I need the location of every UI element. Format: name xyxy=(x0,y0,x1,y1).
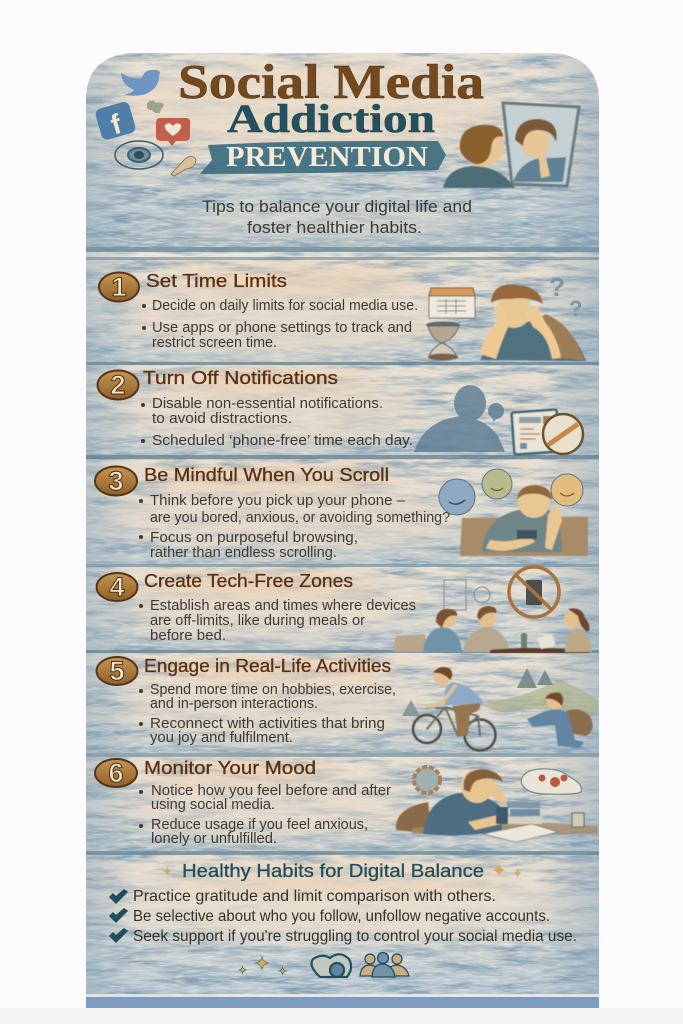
icon: heart cloud xyxy=(312,954,351,977)
section 2: Turn Off Notifications xyxy=(98,367,583,454)
panel: textured background xyxy=(86,52,599,1008)
icon: stars: ✦ xyxy=(254,953,270,975)
bullets 4: Establish areas and times where devices xyxy=(150,598,416,614)
checklist: Seek support if you're struggling to control your social media use. xyxy=(133,928,577,945)
bullets 3: are you bored, anxious, or avoiding something? xyxy=(150,510,450,526)
subtitle: foster healthier habits. xyxy=(247,219,422,237)
bullets 4 xyxy=(139,598,416,644)
landscape xyxy=(402,668,598,716)
checklist xyxy=(110,888,577,945)
heading: Healthy Habits: Healthy Habits for Digital Balance xyxy=(182,860,484,881)
bullets 5 xyxy=(139,682,396,746)
bullets 1: Use apps or phone settings to track and xyxy=(152,320,412,336)
icon: facebook: f xyxy=(107,108,125,141)
subtitle: Tips to balance your digital life and xyxy=(202,198,472,216)
icon: community people xyxy=(360,952,409,977)
icon: heart bubble xyxy=(156,118,190,146)
number badge 6: 6 xyxy=(108,758,124,788)
section 5: Engage in Real-Life Activities xyxy=(96,655,598,750)
heading 5: Engage in Real-Life Activities xyxy=(144,655,391,676)
faint window and clock xyxy=(444,580,490,610)
bullets 3: Focus on purposeful browsing, xyxy=(150,530,358,546)
number badge 2 xyxy=(98,370,138,400)
number badge 4: 4 xyxy=(109,572,125,602)
bullets 1: restrict screen time. xyxy=(152,335,277,351)
question marks xyxy=(549,272,582,321)
section 3: Be Mindful When You Scroll xyxy=(95,464,588,561)
number badge 3 xyxy=(95,466,137,496)
bullets 2: to avoid distractions. xyxy=(152,411,292,427)
number badge 3: 3 xyxy=(108,466,124,496)
icon: twitter bird xyxy=(121,70,160,96)
number badge 1: 1 xyxy=(111,272,127,302)
number badge 4 xyxy=(96,572,138,602)
bullets 6: Notice how you feel before and after xyxy=(151,783,391,799)
number badge 5 xyxy=(96,656,138,686)
icon: eye xyxy=(115,141,163,169)
bullets 5: and in-person interactions. xyxy=(150,696,318,712)
heading 3: Be Mindful When You Scroll xyxy=(144,464,389,485)
number badge 6 xyxy=(95,758,137,788)
bullets 2 xyxy=(141,396,413,449)
bullets 5: Spend more time on hobbies, exercise, xyxy=(150,682,396,698)
bullets 2: Disable non-essential notifications. xyxy=(152,396,383,412)
icon: no-phone sign xyxy=(509,567,559,617)
bullets 6: lonely or unfulfilled. xyxy=(151,831,277,847)
sparkles: ✦ xyxy=(512,867,523,882)
illustration: stressed man xyxy=(480,285,586,361)
number badge 5: 5 xyxy=(109,656,125,686)
illustration: man reading with phone xyxy=(396,769,598,842)
number badge 2: 2 xyxy=(110,370,126,400)
icon: hourglass xyxy=(426,322,460,360)
bullets 6: using social media. xyxy=(151,797,275,813)
illustration: shadow figure xyxy=(414,385,505,452)
bullets 3: rather than endless scrolling. xyxy=(150,545,337,561)
icon: pointing hand xyxy=(171,156,196,176)
icon: stars: ✦ xyxy=(278,965,287,978)
illustration: boy and mirror xyxy=(443,103,579,188)
section 4: Create Tech-Free Zones xyxy=(96,567,592,653)
heading 2: Turn Off Notifications xyxy=(143,367,338,388)
checklist: Practice gratitude and limit comparison with others. xyxy=(133,888,496,905)
icon: gear doodle xyxy=(414,767,440,793)
heading 1: Set Time Limits xyxy=(146,270,287,291)
illustration: people at a table xyxy=(393,606,592,653)
illustration: hiker with backpack xyxy=(527,692,593,748)
sparkles xyxy=(162,860,523,882)
title banner: Prevention: PREVENTION xyxy=(226,142,428,173)
heading 4: Create Tech-Free Zones xyxy=(144,570,353,591)
section 6: Monitor Your Mood xyxy=(95,757,598,847)
bullets 4: before bed. xyxy=(150,628,226,644)
heading 6: Monitor Your Mood xyxy=(144,757,316,778)
icon: clipboard xyxy=(512,409,559,454)
sparkles: ✦ xyxy=(162,865,173,880)
bullets 1: Decide on daily limits for social media use. xyxy=(152,298,418,314)
emoji bubbles xyxy=(439,469,583,515)
question marks: ? xyxy=(569,296,582,321)
subtitle xyxy=(202,198,472,237)
section 1: Set Time Limits xyxy=(99,270,586,361)
bullets 1 xyxy=(142,298,418,351)
checklist: Be selective about who you follow, unfollow negative accounts. xyxy=(133,908,550,925)
illustration: man with phone on sofa xyxy=(460,485,588,556)
icon: stars: ✦ xyxy=(238,964,247,977)
title: Addiction: Addiction xyxy=(227,96,435,141)
icon: facebook xyxy=(94,101,138,144)
icon: thought bubble with hearts xyxy=(521,769,581,794)
icon: stars xyxy=(238,953,287,978)
icon: calendar xyxy=(429,288,475,318)
bullets 3: Think before you pick up your phone – xyxy=(150,493,406,509)
bullets 3 xyxy=(139,493,450,561)
sparkles: ✦ xyxy=(491,860,507,882)
icon: no-phone sign xyxy=(543,414,583,454)
title: Social Media: Social Media xyxy=(178,54,484,109)
bullets 6: Reduce usage if you feel anxious, xyxy=(151,817,368,833)
icon: clover doodle xyxy=(147,100,164,113)
bullets 4: are off-limits, like during meals or xyxy=(150,613,365,629)
bullets 5: you joy and fulfilment. xyxy=(150,730,293,746)
page footer shade xyxy=(0,1008,683,1024)
illustration: cyclist xyxy=(413,667,496,750)
panel: Healthy Habits xyxy=(110,860,577,978)
bullets 2: Scheduled ‘phone-free’ time each day. xyxy=(152,433,413,449)
bullets 5: Reconnect with activities that bring xyxy=(150,716,385,732)
bullets 6 xyxy=(139,783,391,847)
question marks: ? xyxy=(549,272,565,302)
number badge 1 xyxy=(99,272,139,302)
